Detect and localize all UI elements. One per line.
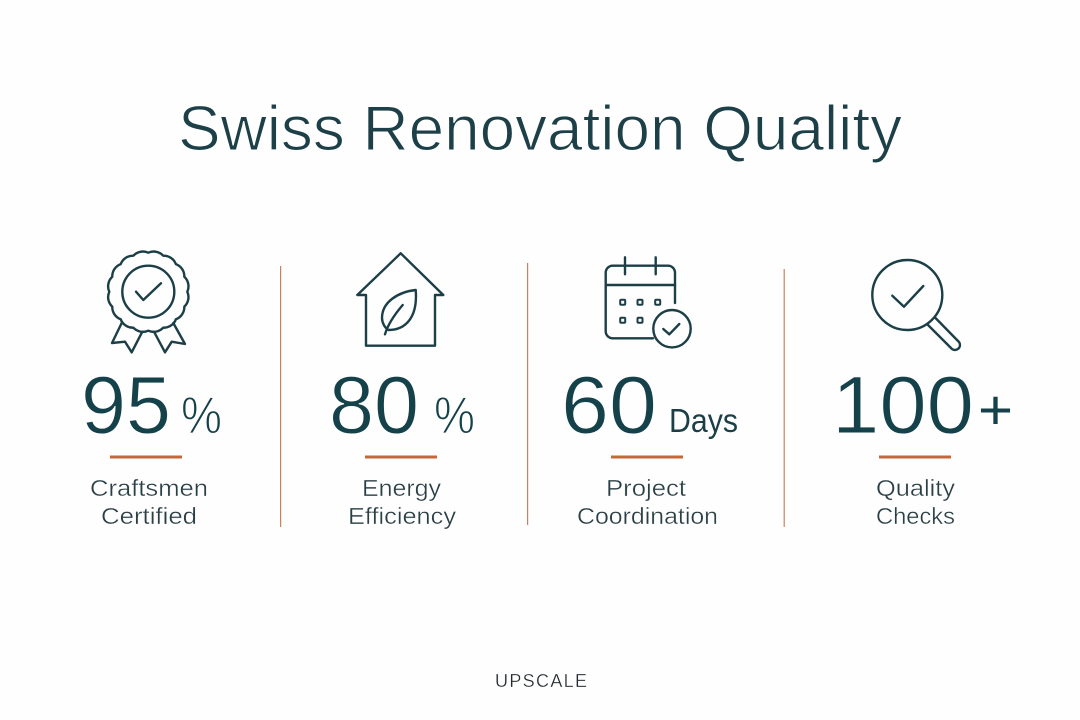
label: project coordination	[577, 475, 718, 529]
icon: calendar with check	[606, 257, 691, 347]
label: project coordination: Coordination	[577, 503, 718, 529]
panel: craftsmen certified	[81, 252, 222, 529]
stat: 95%	[81, 360, 222, 451]
label: quality checks: Quality	[876, 475, 956, 501]
accent bar	[611, 456, 683, 458]
stat: 80%	[329, 360, 475, 451]
icon: award badge with check	[108, 252, 188, 352]
stat: 60 Days: 60	[561, 360, 657, 451]
footer logo: UPSCALE	[495, 671, 587, 691]
label: energy efficiency	[348, 475, 457, 529]
panel: project coordination	[561, 257, 738, 529]
accent bar	[365, 456, 437, 458]
stat: 80%: %	[434, 387, 475, 445]
stat: 60 Days: Days	[669, 402, 738, 439]
label: energy efficiency: Energy	[362, 475, 442, 501]
label: project coordination: Project	[606, 475, 687, 501]
label: quality checks	[876, 475, 956, 529]
stat: 95%: 95	[81, 360, 171, 451]
accent bar	[879, 456, 951, 458]
icon: magnifier with check	[872, 260, 960, 350]
stat: 60 Days	[561, 360, 738, 451]
panel: quality checks	[832, 260, 1013, 529]
icon: house with leaf	[357, 253, 443, 346]
label: quality checks: Checks	[876, 503, 955, 529]
panel: energy efficiency	[329, 253, 475, 529]
title: Swiss Renovation Quality	[178, 94, 902, 164]
label: craftsmen certified	[90, 475, 208, 529]
accent bar	[110, 456, 182, 458]
stat: 100+: 100	[832, 360, 974, 451]
label: craftsmen certified: Craftsmen	[90, 475, 208, 501]
label: energy efficiency: Efficiency	[348, 503, 457, 529]
stat: 80%: 80	[329, 360, 419, 451]
label: craftsmen certified: Certified	[101, 503, 197, 529]
stat: 100+: +	[978, 378, 1013, 441]
stat: 95%: %	[181, 387, 222, 445]
